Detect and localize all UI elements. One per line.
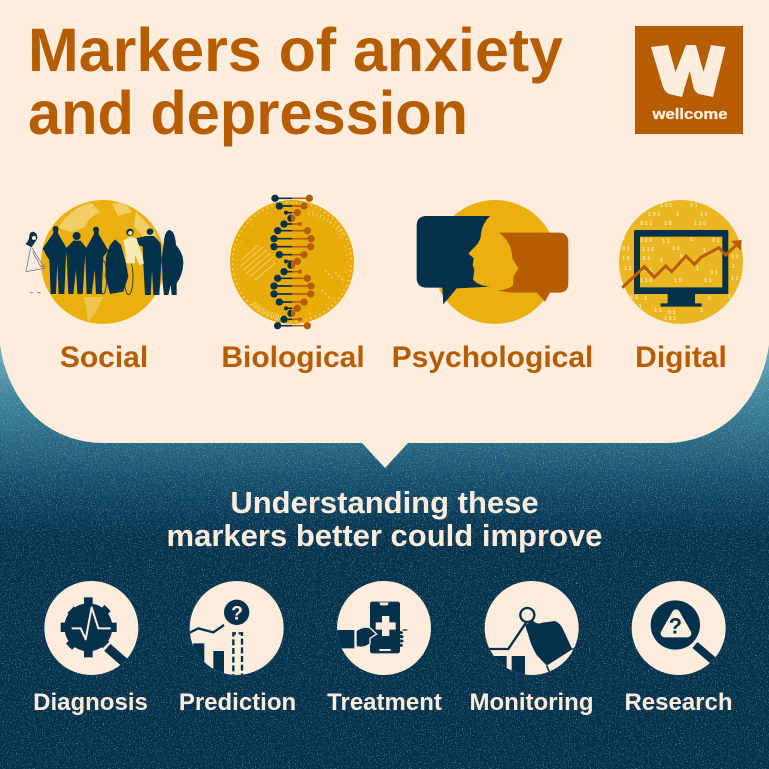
binary digits: 0	[680, 254, 683, 260]
icon: diagnosis	[44, 581, 138, 675]
magnifier lens	[651, 600, 700, 650]
binary digits: 1	[732, 264, 735, 270]
dashed bar	[233, 633, 242, 680]
icon: research	[632, 581, 726, 675]
binary digits: 1	[728, 294, 731, 300]
binary digits: 0 1 1	[640, 268, 652, 274]
binary digits: 1 0 1	[660, 203, 672, 209]
plus sign	[376, 616, 396, 636]
label: Research: Research	[624, 689, 733, 716]
label: Treatment: Treatment	[327, 689, 442, 716]
binary digits: 1 1 0	[642, 247, 654, 253]
binary digits: 1	[668, 268, 671, 274]
subheading	[167, 485, 602, 553]
bars	[494, 656, 525, 674]
binary digits: 1	[690, 237, 693, 243]
binary digits: 0 1	[622, 246, 630, 252]
rungs right	[292, 198, 311, 326]
binary digits: 0 1	[634, 304, 642, 310]
logo: wellcome	[635, 26, 743, 134]
monitor	[634, 230, 728, 307]
binary digits: 1	[696, 266, 699, 272]
subheading: Understanding these	[230, 485, 539, 520]
binary digits: 1 1 0	[640, 278, 652, 284]
binary digits: 1 0 0	[640, 238, 652, 244]
binary digits: 1	[622, 236, 625, 242]
label: Monitoring: Monitoring	[470, 689, 593, 716]
world map texture	[58, 202, 160, 322]
outlined figure	[123, 229, 144, 265]
title: Markers of anxiety	[28, 16, 563, 84]
title: and depression	[28, 79, 468, 147]
binary digits: 1	[703, 248, 706, 254]
DNA strands	[270, 195, 315, 329]
pulse line	[72, 607, 111, 639]
icon: psychological	[417, 200, 568, 324]
navy face bubble	[417, 216, 491, 304]
panel: speech bubble	[0, 0, 769, 468]
label: Psychological: Psychological	[392, 341, 593, 374]
icon: digital	[619, 200, 743, 324]
orange face bubble	[497, 233, 568, 302]
binary digits: 0 1	[712, 238, 720, 244]
icon: social	[25, 200, 183, 324]
dots left	[270, 195, 291, 329]
label: Biological: Biological	[221, 341, 365, 374]
warning triangle	[665, 613, 687, 633]
hand left	[335, 630, 354, 648]
phone	[370, 602, 400, 653]
binary digits: 0 1 1	[640, 221, 652, 227]
sketched woman	[25, 232, 45, 293]
binary digits: 1 0	[672, 246, 680, 252]
binary digits: 1	[700, 308, 703, 314]
cuff	[547, 647, 577, 672]
dots right	[288, 195, 315, 329]
title	[28, 16, 563, 147]
binary digits: 1	[644, 296, 647, 302]
binary digits: 1 0 1	[638, 256, 650, 262]
binary digits: 1 0	[622, 256, 630, 262]
pointing hand	[525, 621, 572, 666]
binary digits: 1 1	[624, 266, 632, 272]
binary digits: 0	[708, 296, 711, 302]
label: Digital: Digital	[635, 341, 727, 374]
magnifier handle	[104, 644, 127, 665]
label: Prediction: Prediction	[179, 689, 296, 716]
DNA texture	[233, 203, 351, 321]
binary digits	[622, 203, 739, 322]
bars	[193, 643, 224, 674]
logo: wellcome: wellcome	[651, 107, 728, 123]
binary digits: 1 0	[700, 212, 708, 218]
binary digits: 1	[676, 212, 679, 218]
binary digits: 1 1	[662, 239, 670, 245]
question badge	[224, 600, 249, 625]
binary digits: 1 1	[731, 276, 739, 282]
subheading: markers better could improve	[167, 518, 602, 553]
binary digits: 0 1	[668, 310, 676, 316]
icon: prediction	[188, 581, 284, 680]
binary digits: 1 0 1	[648, 212, 660, 218]
chart line	[487, 622, 527, 649]
background grain	[0, 340, 769, 769]
people silhouettes	[43, 226, 183, 295]
binary digits: 1	[660, 258, 663, 264]
fingers right	[397, 633, 402, 645]
label: Diagnosis: Diagnosis	[33, 689, 148, 716]
binary digits: 0 1	[690, 203, 698, 209]
touch ring	[520, 608, 534, 622]
trend line	[188, 625, 224, 633]
icon: research: ?	[669, 613, 682, 638]
binary digits: 1 0	[664, 221, 672, 227]
binary digits: 1 0	[731, 254, 739, 260]
binary digits: 1 0 1	[664, 316, 676, 322]
gear	[60, 597, 117, 658]
binary digits: 1 0 1	[626, 295, 638, 301]
icon: prediction: ?	[231, 603, 243, 624]
icon: treatment	[335, 581, 431, 675]
binary digits: 1 0	[674, 278, 682, 284]
magnifier handle	[695, 645, 713, 661]
binary digits: 1 1 0	[694, 221, 706, 227]
wheelchair wheels	[100, 260, 133, 295]
icon: biological DNA	[230, 195, 354, 329]
binary digits: 0 1	[704, 278, 712, 284]
icon: monitoring	[485, 581, 579, 680]
trend arrow	[622, 240, 742, 288]
rungs left	[274, 198, 292, 326]
binary digits: 0 1	[710, 270, 718, 276]
label: Social: Social	[60, 341, 148, 374]
binary digits: 1 1	[654, 308, 662, 314]
